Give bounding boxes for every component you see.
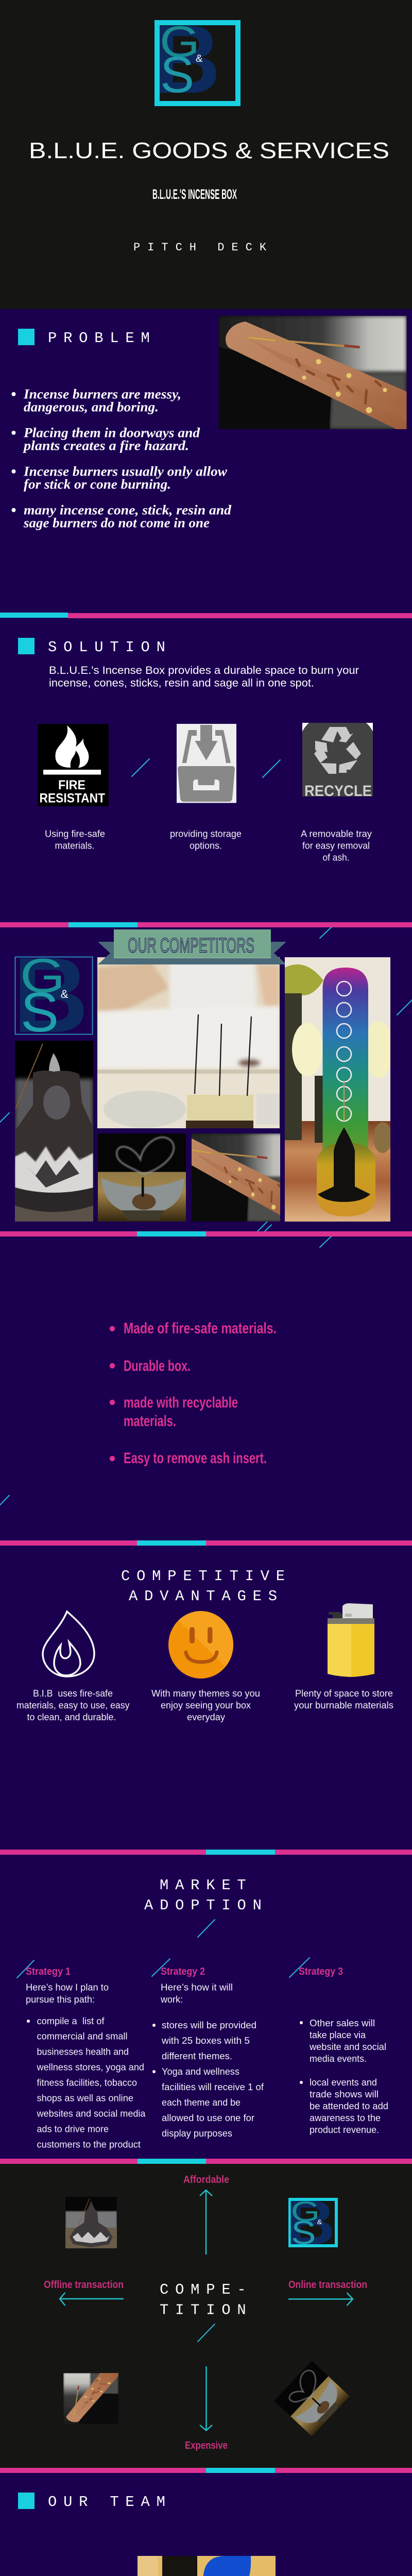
problem bullet list: many incense cone, stick, resin and — [24, 503, 232, 517]
caption: fire-safe advantage — [16, 1688, 130, 1722]
caption: storage: providing storage — [170, 828, 242, 839]
caption: removable tray: A removable tray — [301, 828, 372, 839]
solution description: B.L.U.E.'s Incense Box provides a durable space to burn your — [49, 665, 359, 676]
panel: solution — [0, 613, 412, 922]
heading: problem: PROBLEM — [48, 330, 157, 347]
strategy 2 — [152, 1966, 264, 2139]
photo: smoke heart bowl — [98, 1133, 186, 1222]
logo box: G — [20, 949, 65, 1003]
section marker — [18, 329, 35, 345]
strategy 2: stores will be provided — [162, 2020, 256, 2030]
caption: themes advantage — [151, 1688, 260, 1722]
arrow: right — [288, 2293, 353, 2306]
label: expensive: Expensive — [185, 2440, 228, 2451]
photo: meditation with incense — [97, 957, 280, 1128]
logo box: & — [61, 988, 68, 1001]
logo frame: & — [196, 53, 203, 64]
heading: solution: SOLUTION — [48, 639, 172, 656]
heading: competition: TITION — [160, 2302, 252, 2318]
panel: competitors — [0, 922, 412, 1236]
problem bullet list: Incense burners usually only allow — [23, 464, 228, 479]
strategy 1: websites and social media — [36, 2108, 146, 2119]
strategy 3: local events and — [310, 2077, 377, 2088]
logo: B.L.U.E. position: & — [317, 2218, 322, 2226]
caption: fire-safe: materials. — [55, 841, 95, 851]
caption: removable tray — [301, 828, 372, 862]
slash — [263, 760, 280, 777]
problem bullet list: Incense burners are messy, — [23, 386, 181, 402]
strategy 3: media events. — [310, 2054, 367, 2064]
problem bullet list: Placing them in doorways and — [23, 426, 200, 440]
heading: our team: OUR TEAM — [48, 2494, 172, 2511]
label: online transaction: Online transaction — [288, 2279, 367, 2291]
solution description — [49, 665, 359, 689]
photo: rotated heart bowl — [274, 2361, 350, 2436]
caption: fire-safe — [45, 828, 105, 851]
photo: rotated wooden burner — [63, 2373, 118, 2424]
photo: CEO portrait — [138, 2556, 276, 2576]
caption: storage — [170, 828, 242, 851]
strategy 1: shops as well as online — [37, 2093, 133, 2103]
benefits bullet list: Durable box. — [124, 1358, 191, 1375]
logo: B.L.U.E. position: B — [286, 2187, 335, 2258]
benefits bullet list: Easy to remove ash insert. — [124, 1450, 267, 1467]
arrow: left — [60, 2293, 124, 2306]
problem bullet list — [11, 386, 232, 531]
ribbon banner — [98, 929, 286, 964]
slash — [132, 759, 149, 776]
strategy 1: commercial and small — [37, 2031, 128, 2041]
strategy 3: website and social — [309, 2042, 386, 2052]
strategy 1: compile a list of — [37, 2016, 105, 2026]
panel: competition matrix — [0, 2159, 412, 2468]
logo frame: B — [153, 5, 220, 114]
strategy 1: Here’s how I plan to — [26, 1982, 109, 1993]
icon: lighter — [328, 1603, 374, 1677]
subtitle: B.L.U.E.'S INCENSE BOX — [152, 187, 237, 202]
strategy 1: wellness stores, yoga and — [36, 2062, 144, 2072]
strategy 3 — [299, 1966, 388, 2135]
label: affordable: Affordable — [183, 2174, 229, 2185]
heading: market adoption: ADOPTION — [144, 1897, 268, 1914]
panel: problem — [0, 309, 412, 613]
heading: competition: COMPE- — [160, 2281, 252, 2298]
caption: fire-safe: Using fire-safe — [45, 828, 105, 839]
icon: fire resistant sign — [38, 724, 109, 806]
logo frame: G — [160, 18, 200, 66]
icon: flame outline — [43, 1612, 94, 1676]
caption: removable tray: for easy removal — [302, 841, 370, 851]
strategy 2: Yoga and wellness — [162, 2066, 239, 2077]
ribbon banner: OUR COMPETITORS — [128, 935, 254, 957]
solution description: incense, cones, sticks, resin and sage all in one spot. — [49, 677, 314, 689]
benefits bullet list — [110, 1320, 277, 1467]
caption: storage advantage: Plenty of space to store — [295, 1688, 393, 1699]
strategy 2: each theme and be — [162, 2097, 241, 2108]
photo: small fountain burner — [65, 2197, 117, 2248]
panel: title cover — [0, 0, 412, 309]
caption: fire-safe advantage: B.I.B uses fire-safe — [33, 1688, 113, 1699]
heading: market adoption: MARKET — [160, 1877, 252, 1894]
icon: storage box — [177, 724, 236, 803]
strategy 1: businesses health and — [37, 2046, 129, 2057]
strategy 2: facilities will receive 1 of — [162, 2082, 264, 2092]
logo: B.L.U.E. position: G — [291, 2196, 320, 2227]
icon: recycle sign — [302, 723, 373, 800]
caption: fire-safe advantage: materials, easy to use, easy — [16, 1700, 130, 1710]
caption: themes advantage: With many themes so you — [151, 1688, 260, 1699]
strategy 2: display purposes — [162, 2128, 232, 2139]
photo: wooden incense burner — [218, 316, 407, 429]
strategy 2: work: — [160, 1994, 183, 2005]
panel: our team — [0, 2468, 412, 2576]
heading: market adoption — [144, 1877, 268, 1914]
strategy 1: Strategy 1 — [26, 1966, 71, 1977]
arrow: down — [200, 2366, 212, 2431]
caption: fire-safe advantage: to clean, and durable. — [27, 1712, 116, 1722]
caption: storage: options. — [190, 841, 222, 851]
strategy 1: ads to drive more — [37, 2124, 109, 2134]
heading: competitive advantages — [121, 1568, 291, 1605]
strategy 1: fitness facilities, tobacco — [37, 2077, 137, 2088]
strategy 3: awareness to the — [310, 2113, 381, 2123]
label: pitch deck: PITCH DECK — [133, 241, 273, 254]
strategy 3: be attended to add — [310, 2101, 388, 2111]
logo box: S — [21, 981, 59, 1044]
photo: backflow fountain burner — [15, 1041, 93, 1222]
heading: competition — [160, 2281, 252, 2318]
problem bullet list: sage burners do not come in one — [23, 515, 210, 531]
panel: market adoption — [0, 1850, 412, 2164]
strategy 2: Here’s how it will — [161, 1982, 233, 1993]
section marker — [18, 638, 35, 654]
problem bullet list: for stick or cone burning. — [24, 477, 171, 492]
icon: smiley face — [168, 1611, 233, 1679]
photo: wooden burner — [192, 1133, 280, 1222]
icon: fire resistant sign: RESISTANT — [39, 791, 105, 806]
logo frame: S — [160, 46, 194, 103]
panel: competitive advantages — [0, 1540, 412, 1722]
logo box: B — [13, 935, 89, 1055]
caption: removable tray: of ash. — [322, 852, 349, 862]
panel: product benefits — [0, 1231, 412, 1546]
label: offline transaction: Offline transaction — [44, 2279, 124, 2291]
strategy 3: Other sales will — [310, 2018, 375, 2028]
caption: themes advantage: enjoy seeing your box — [161, 1700, 251, 1710]
problem bullet list: dangerous, and boring. — [24, 400, 159, 414]
arrow: up — [200, 2190, 212, 2255]
heading: competitive advantages: COMPETITIVE — [121, 1568, 291, 1585]
strategy 1 — [26, 1966, 146, 2149]
strategy 2: allowed to use one for — [162, 2113, 254, 2123]
strategy 2: with 25 boxes with 5 — [161, 2036, 250, 2046]
heading: competitive advantages: ADVANTAGES — [129, 1588, 284, 1605]
strategy 2: different themes. — [162, 2051, 232, 2061]
strategy 2: Strategy 2 — [161, 1966, 205, 1977]
strategy 1: pursue this path: — [26, 1994, 95, 2005]
icon: fire resistant sign: FIRE — [58, 778, 85, 792]
benefits bullet list: Made of fire-safe materials. — [124, 1320, 277, 1337]
strategy 3: Strategy 3 — [299, 1966, 343, 1977]
logo: B.L.U.E. position: S — [291, 2214, 316, 2251]
problem bullet list: plants creates a fire hazard. — [23, 438, 189, 453]
section marker — [18, 2493, 35, 2509]
strategy 3: take place via — [310, 2030, 366, 2040]
strategy 3: product revenue. — [310, 2125, 379, 2135]
caption: themes advantage: everyday — [187, 1712, 225, 1722]
benefits bullet list: made with recyclable — [124, 1394, 238, 1411]
strategy 1: customers to the product — [37, 2139, 141, 2149]
title: B.L.U.E. GOODS & SERVICES — [29, 138, 389, 163]
benefits bullet list: materials. — [124, 1413, 176, 1430]
photo: chakra incense holder — [285, 957, 390, 1222]
caption: storage advantage: your burnable materials — [294, 1700, 393, 1710]
strategy 3: trade shows will — [310, 2089, 379, 2099]
icon: recycle sign: RECYCLE — [304, 783, 372, 800]
caption: storage advantage — [294, 1688, 393, 1710]
